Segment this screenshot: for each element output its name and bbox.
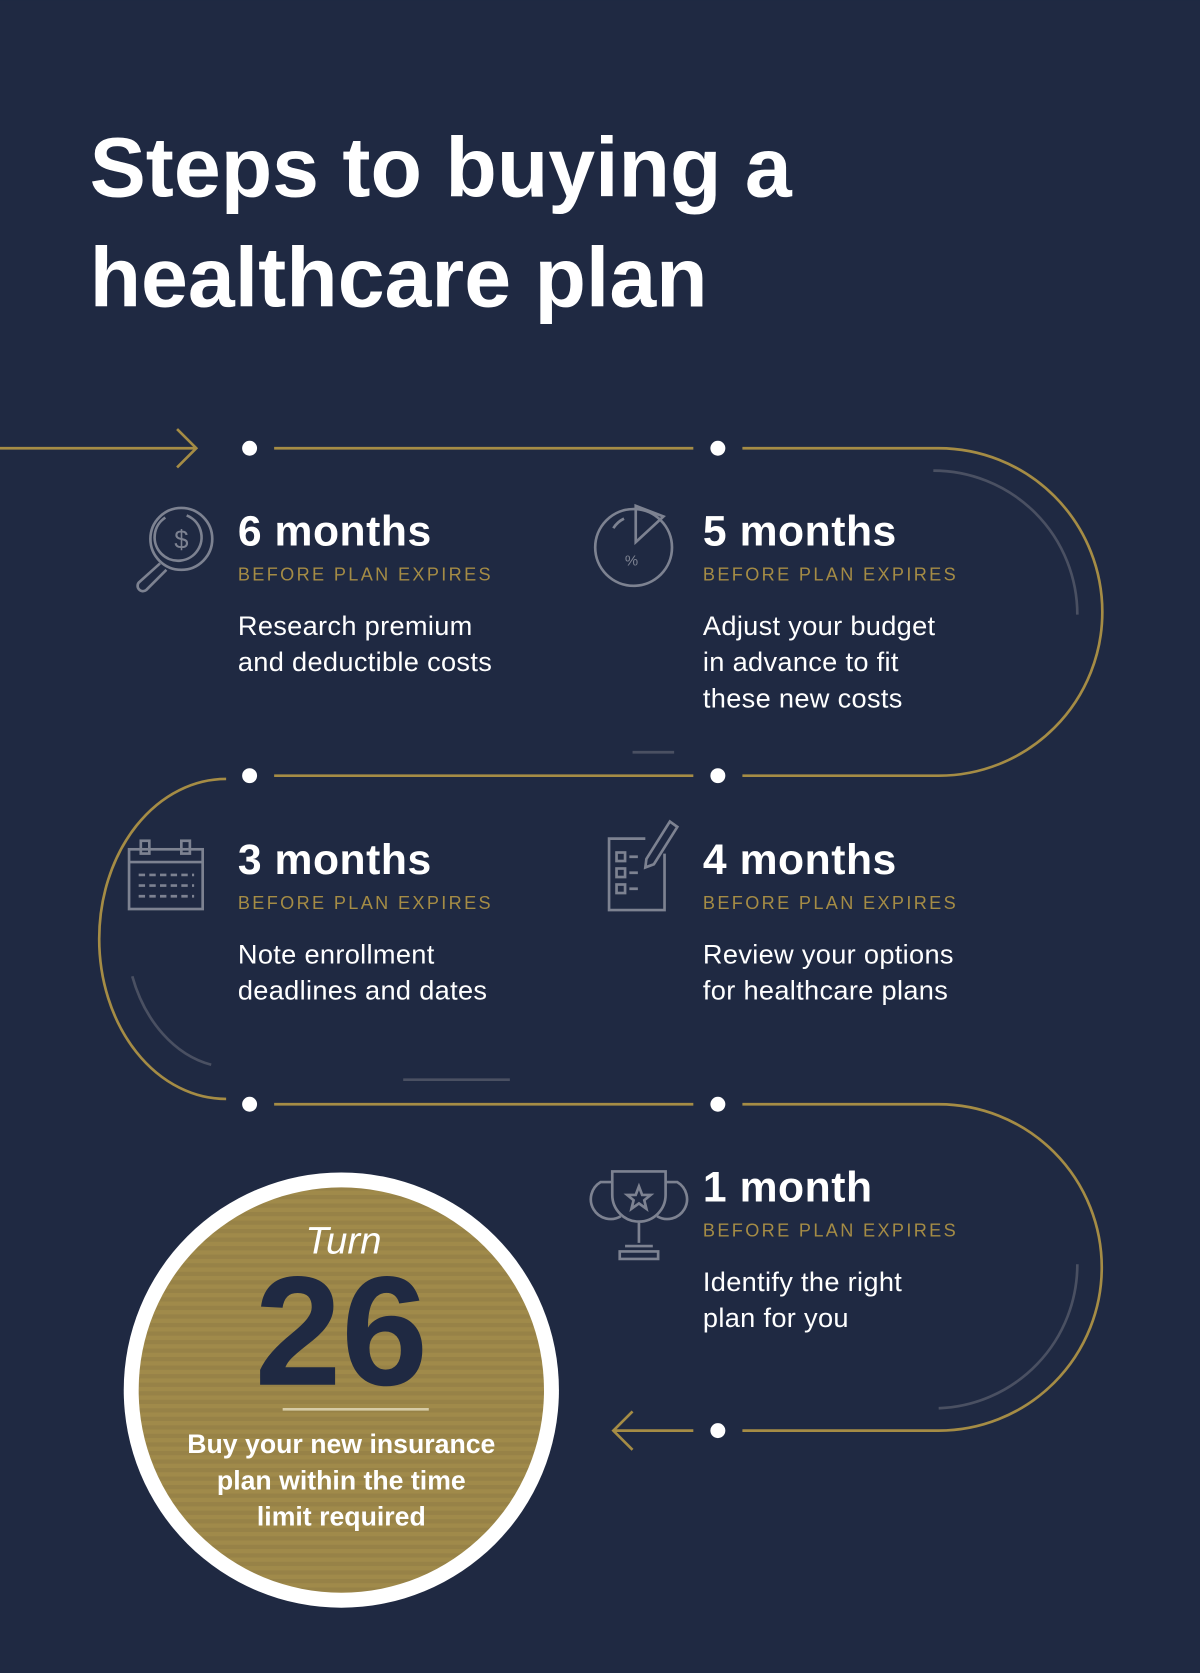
step: 6 months: Research premium [238, 610, 473, 641]
step: 6 months: and deductible costs [238, 646, 492, 677]
icon: checklist [609, 822, 677, 910]
step: 4 months [609, 822, 958, 1006]
icon: pie percent [595, 506, 672, 586]
step: 3 months: deadlines and dates [238, 975, 487, 1006]
title: Steps to buying a [90, 120, 793, 214]
step: 1 month: plan for you [703, 1302, 849, 1333]
callout: turn 26 circle: Turn [305, 1220, 382, 1263]
callout: turn 26 circle: plan within the time [217, 1465, 466, 1495]
step: 5 months: these new costs [703, 682, 903, 713]
step: 4 months: 4 months [703, 836, 897, 884]
icon: magnifier dollar [138, 508, 212, 591]
callout: turn 26 circle [124, 1172, 559, 1608]
step: 6 months: 6 months [238, 507, 432, 555]
step: 3 months: 3 months [238, 836, 432, 884]
title [90, 120, 793, 324]
icon: calendar [129, 841, 203, 909]
callout: turn 26 circle: limit required [257, 1502, 426, 1532]
step: 5 months: in advance to fit [703, 646, 899, 677]
step: 5 months: 5 months [703, 507, 897, 555]
step: 5 months: Adjust your budget [703, 610, 936, 641]
step: 4 months: Review your options [703, 938, 954, 969]
step: 1 month: BEFORE PLAN EXPIRES [703, 1220, 958, 1240]
icon: pie percent: % [625, 553, 638, 570]
step: 3 months [129, 836, 493, 1006]
icon: magnifier dollar: $ [174, 527, 188, 555]
timeline path [0, 429, 1102, 1450]
icon: trophy [591, 1171, 687, 1259]
step: 1 month [591, 1163, 958, 1333]
step: 4 months: for healthcare plans [703, 975, 948, 1006]
step: 6 months [138, 507, 493, 677]
step: 4 months: BEFORE PLAN EXPIRES [703, 893, 958, 913]
callout: turn 26 circle: Buy your new insurance [187, 1429, 495, 1459]
step: 3 months: BEFORE PLAN EXPIRES [238, 893, 493, 913]
step: 6 months: BEFORE PLAN EXPIRES [238, 564, 493, 584]
step: 5 months: BEFORE PLAN EXPIRES [703, 564, 958, 584]
step: 1 month: 1 month [703, 1163, 873, 1211]
step: 1 month: Identify the right [703, 1266, 902, 1297]
step: 3 months: Note enrollment [238, 938, 435, 969]
timeline dots [242, 441, 725, 1438]
title: healthcare plan [90, 230, 708, 324]
callout: turn 26 circle: 26 [255, 1245, 428, 1419]
step: 5 months [595, 506, 958, 713]
